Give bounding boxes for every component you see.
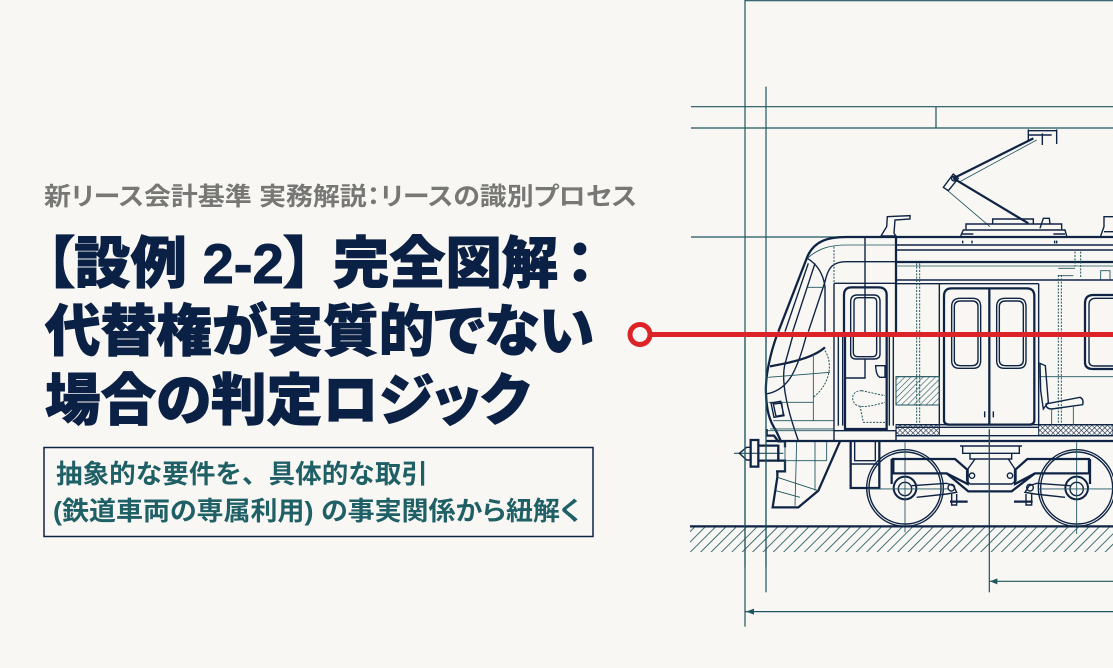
cab front	[766, 334, 896, 441]
callout	[44, 448, 593, 536]
title: ：	[566, 232, 594, 295]
car body upper	[778, 237, 1113, 334]
left wheel	[867, 442, 948, 532]
red marker line	[630, 324, 1113, 344]
coupler and pilot	[734, 429, 840, 507]
bogie frame	[892, 459, 968, 484]
title: 場合の判定ロジック	[45, 369, 530, 432]
lower car body	[690, 334, 1113, 567]
dimension and grid lines	[691, 0, 1113, 627]
hatched panels	[896, 377, 1113, 436]
centre double doors	[939, 284, 1113, 334]
underfloor box	[851, 441, 879, 488]
front door and window	[844, 287, 887, 333]
wheels and bogie	[867, 429, 1113, 534]
title: 完全図解	[333, 232, 558, 295]
callout: (鉄道車両の専属利用) の事実関係から紐解く	[53, 496, 580, 526]
floor and body base	[766, 334, 1113, 441]
pantograph	[943, 129, 1067, 243]
passenger seat	[1040, 363, 1083, 425]
right wheel	[1038, 442, 1113, 534]
subtitle: 新リース会計基準 実務解説：リースの識別プロセス	[44, 183, 637, 211]
dashed service lines	[917, 252, 1110, 334]
title: 代替権が実質的でない	[45, 300, 594, 363]
title: 【設例 2-2】	[46, 232, 312, 295]
ground line and hatching	[690, 334, 1113, 567]
roof horns	[881, 216, 1113, 236]
title	[45, 232, 594, 432]
blueprint train drawing	[690, 0, 1113, 627]
callout: 抽象的な要件を、具体的な取引	[56, 459, 428, 489]
